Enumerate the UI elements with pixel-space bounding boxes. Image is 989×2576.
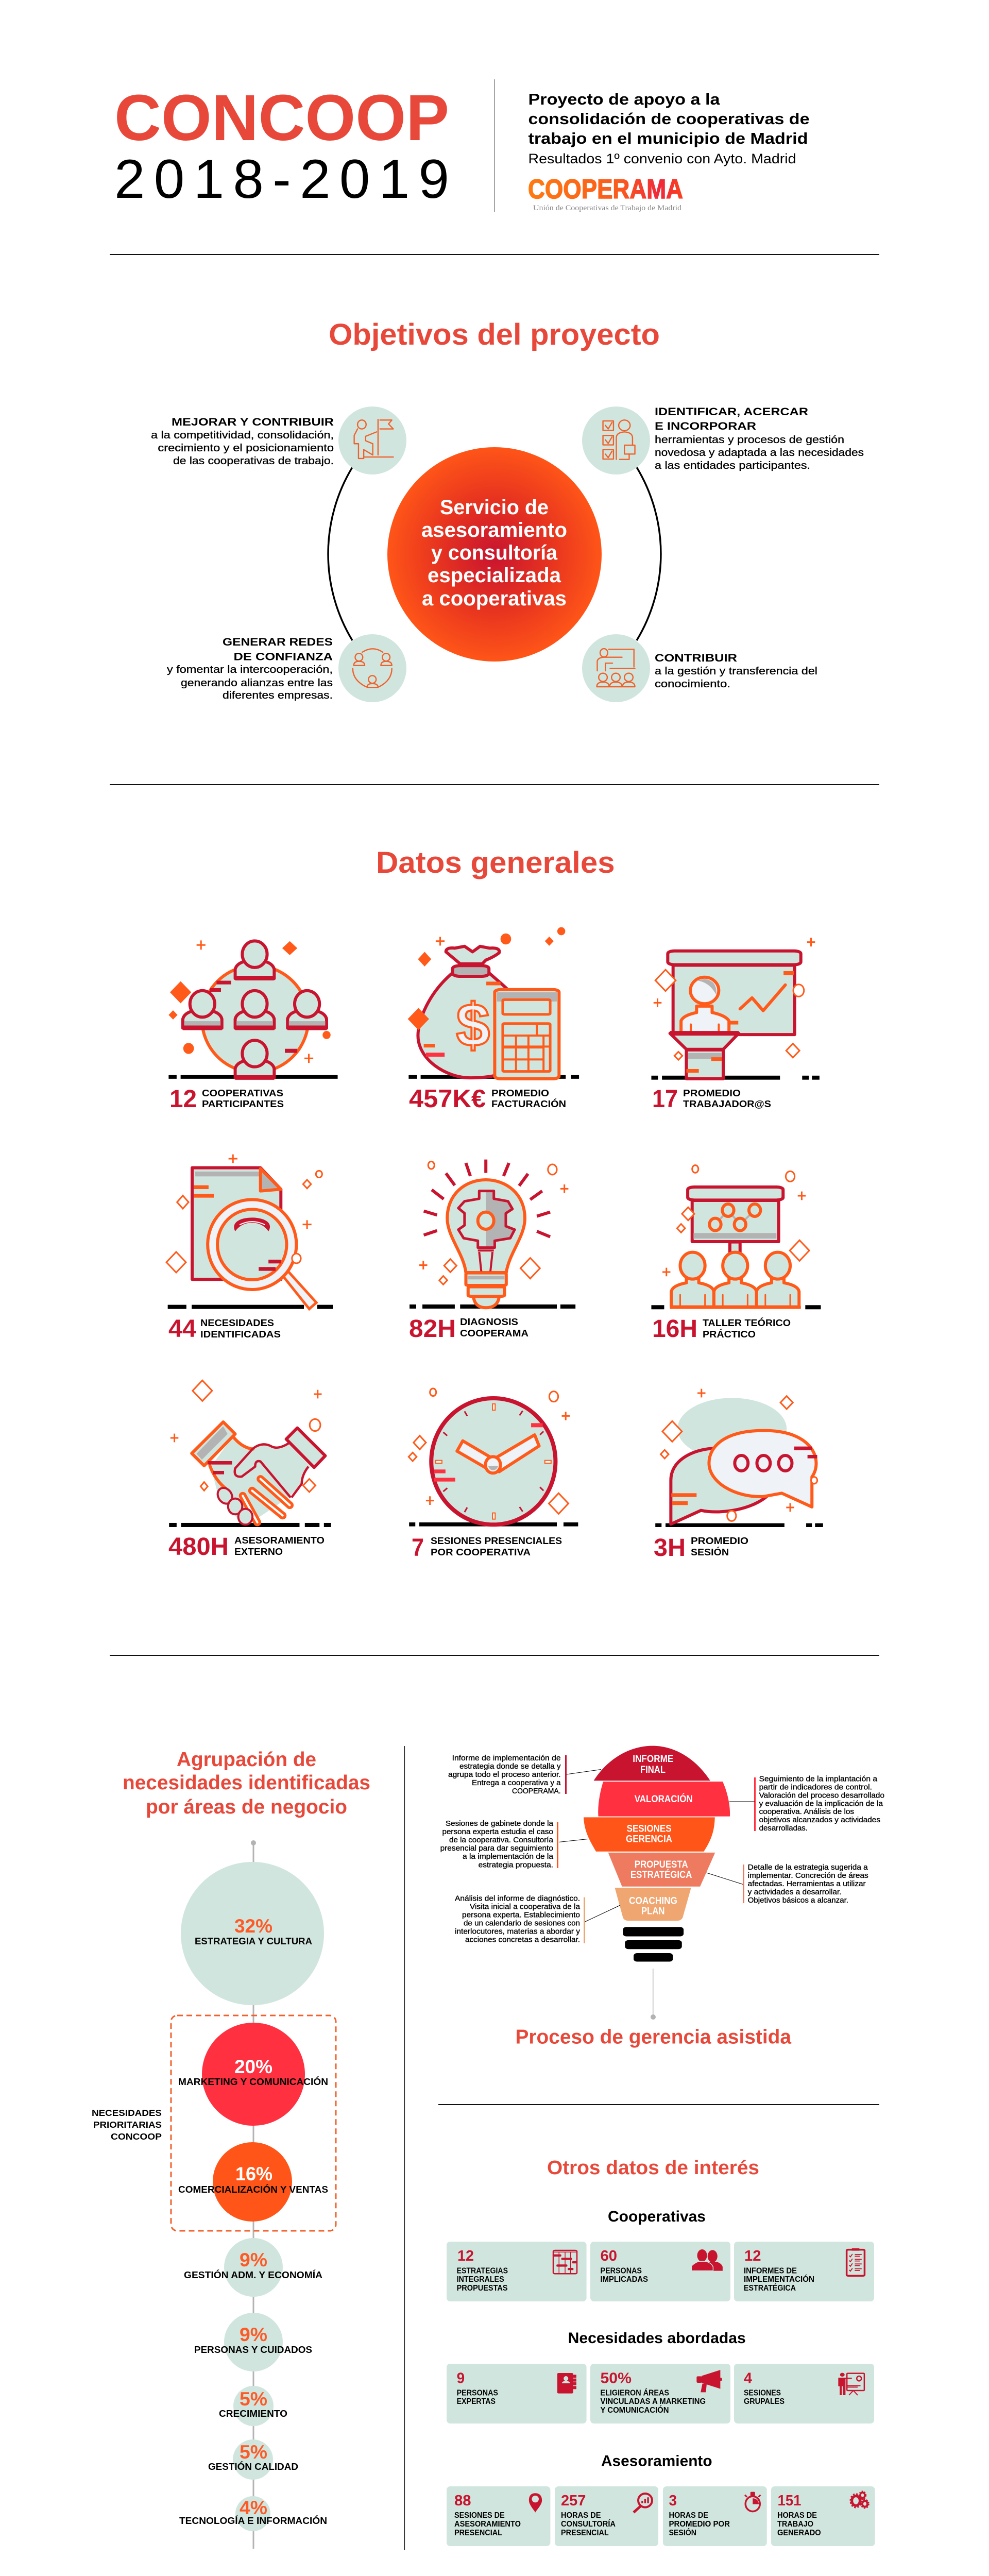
- ring arcs: [328, 467, 661, 640]
- timeline axis: [251, 1840, 256, 2549]
- card: 50% marketing: [590, 2364, 730, 2424]
- card: 4 sesiones grupales: [734, 2364, 874, 2424]
- stat: 457K€: 457K€: [409, 1085, 486, 1113]
- callout: informe final: [448, 1754, 601, 1795]
- icon: bolsa y calculadora: [408, 927, 579, 1079]
- bubble: 5% calidad: [208, 2439, 298, 2480]
- callout: coaching plan: Visita inicial a cooperativa de la: [470, 1903, 581, 1911]
- icon: presentación: [651, 938, 820, 1080]
- stat: 3H promedio: PROMEDIO: [691, 1535, 748, 1546]
- bubble: 4% tecnología: TECNOLOGÍA E INFORMACIÓN: [179, 2515, 327, 2526]
- card: 88 sesiones: ASESORAMIENTO: [454, 2520, 521, 2529]
- stat: 12 cooperativas: 12: [169, 1086, 197, 1113]
- icon: bombilla y engranaje: [410, 1160, 575, 1309]
- stat: 16H taller: TALLER TEÓRICO: [703, 1317, 791, 1328]
- stat: 7 sesiones: POR COOPERATIVA: [431, 1547, 531, 1557]
- stat: 16H taller: [652, 1315, 791, 1343]
- heading: agrupación: por áreas de negocio: [146, 1796, 347, 1818]
- bubble: 4% tecnología: 4%: [240, 2497, 267, 2518]
- bubble: 20%: 20%: [234, 2056, 272, 2077]
- card: 50% marketing: VINCULADAS A MARKETING: [601, 2397, 706, 2406]
- panel: datos generales: [166, 846, 823, 1562]
- card: 9 personas expertas: [447, 2364, 587, 2424]
- subheading: cooperativas: Cooperativas: [608, 2208, 706, 2225]
- callout: valoración: objetivos alcanzados y actividades: [759, 1816, 880, 1824]
- project description: [528, 90, 810, 166]
- chart: bombilla del proceso: [584, 1746, 730, 1962]
- card: 12 estrategias: PROPUESTAS: [457, 2284, 508, 2293]
- icon: cooperativas: [168, 940, 338, 1079]
- note: necesidades prioritarias: [92, 2108, 162, 2142]
- connector to heading: [651, 1969, 656, 2020]
- callout: sesiones gerencia: presencial para dar seguimiento: [440, 1844, 553, 1853]
- card: 257 horas: CONSULTORÍA: [561, 2520, 616, 2529]
- card: 88 sesiones: 88: [454, 2493, 471, 2509]
- card: 50% marketing: ELIGIERON ÁREAS: [601, 2389, 669, 2398]
- text: mejorar y contribuir: crecimiento y el posicionamiento: [158, 443, 334, 454]
- card: 88 sesiones: SESIONES DE: [454, 2511, 505, 2520]
- callout: sesiones gerencia: a la implementación de la: [463, 1853, 554, 1861]
- card: 151 horas: GENERADO: [777, 2529, 821, 2537]
- stat: 44 necesidades: [168, 1315, 281, 1343]
- stat: 7 sesiones: 7: [412, 1534, 424, 1562]
- card: 12 estrategias: [447, 2242, 587, 2301]
- card: 257 horas: [555, 2486, 658, 2546]
- project description: consolidación de cooperativas de: [528, 110, 810, 128]
- icon: bocadillos: [655, 1389, 823, 1527]
- icon: planificación: [553, 2250, 577, 2274]
- heading: agrupación: Agrupación de: [177, 1749, 316, 1771]
- text: identificar: novedosa y adaptada a las necesidades: [655, 447, 864, 459]
- stat: 44 necesidades: 44: [168, 1315, 196, 1343]
- callout: sesiones gerencia: [440, 1820, 588, 1869]
- text: generar redes: diferentes empresas.: [223, 690, 333, 701]
- stat: 7 sesiones: SESIONES PRESENCIALES: [431, 1535, 562, 1546]
- card: 3 horas: [663, 2486, 767, 2546]
- icon: bolsa y calculadora: $: [456, 991, 490, 1059]
- bubble: 20%: MARKETING Y COMUNICACIÓN: [178, 2076, 328, 2087]
- icon: cronómetro: [745, 2492, 760, 2512]
- callout: propuesta estratégica: implementar. Concreción de áreas: [748, 1872, 868, 1880]
- callout: valoración: partir de indicadores de control.: [759, 1784, 872, 1792]
- card: 50% marketing: 50%: [601, 2370, 632, 2387]
- card: 12 informes: ESTRATÉGICA: [744, 2284, 796, 2293]
- card: 9 personas expertas: PERSONAS: [457, 2389, 498, 2398]
- card: 257 horas: 257: [561, 2493, 586, 2509]
- labels de las fases: PLAN: [641, 1906, 664, 1917]
- callout: propuesta estratégica: afectadas. Herramientas a utilizar: [748, 1880, 866, 1888]
- icon: objective circles: [338, 406, 650, 702]
- stat: 3H promedio: [654, 1534, 748, 1562]
- stat: 3H promedio: 3H: [654, 1534, 686, 1562]
- stat: 17 trabajadores: PROMEDIO: [683, 1088, 741, 1098]
- bubble: 5% crecimiento: [219, 2386, 287, 2426]
- card: 88 sesiones: [447, 2486, 550, 2546]
- card: 3 horas: HORAS DE: [669, 2511, 708, 2520]
- bubble: 9% personas: [194, 2313, 312, 2371]
- bubble: 4% tecnología: [179, 2496, 327, 2531]
- stat: 457K€: [409, 1085, 566, 1113]
- stat: 480H asesoramiento: EXTERNO: [234, 1546, 283, 1557]
- callout: informe final: estrategia donde se detalla y: [459, 1762, 561, 1771]
- icon: agenda: [557, 2373, 576, 2394]
- text: generar redes: [167, 636, 333, 701]
- text: identificar: herramientas y procesos de gestión: [655, 434, 844, 446]
- card: 12 estrategias: ESTRATEGIAS: [457, 2267, 508, 2276]
- years: 2018-2019: [114, 148, 449, 210]
- note: necesidades prioritarias: PRIORITARIAS: [93, 2120, 162, 2130]
- stat: 17 trabajadores: [652, 1086, 771, 1113]
- stat: 16H taller: PRÁCTICO: [703, 1329, 756, 1340]
- text: identificar: IDENTIFICAR, ACERCAR: [655, 406, 808, 418]
- central circle: a cooperativas: [422, 587, 567, 610]
- heading: datos generales: Datos generales: [376, 846, 615, 879]
- heading: agrupación: necesidades identificadas: [123, 1772, 370, 1794]
- card: 50% marketing: Y COMUNICACIÓN: [601, 2405, 669, 2415]
- text: generar redes: generando alianzas entre las: [181, 677, 333, 689]
- callout: propuesta estratégica: Objetivos básicos a alcanzar.: [748, 1896, 848, 1905]
- priority box: [171, 2015, 336, 2231]
- callout: valoración: Valoración del proceso desarrollado: [759, 1792, 884, 1800]
- callout: sesiones gerencia: persona experta estudia el caso: [442, 1828, 553, 1836]
- callout: valoración: y evaluación de la implicación de la: [759, 1800, 883, 1808]
- project description: Resultados 1º convenio con Ayto. Madrid: [528, 151, 796, 166]
- stat: 12 cooperativas: PARTICIPANTES: [202, 1098, 284, 1109]
- callout: sesiones gerencia: estrategia propuesta.: [479, 1861, 553, 1869]
- card: 151 horas: HORAS DE: [777, 2511, 817, 2520]
- labels de las fases: INFORME: [633, 1754, 673, 1765]
- callout: propuesta estratégica: y actividades a desarrollar.: [748, 1888, 842, 1896]
- stat: 16H taller: 16H: [652, 1315, 697, 1343]
- text: contribuir: [655, 652, 817, 690]
- header divider: [494, 79, 495, 212]
- bubble: 20%: [178, 2023, 328, 2126]
- icon: reloj: [408, 1388, 578, 1527]
- card: 9 personas expertas: 9: [457, 2370, 465, 2387]
- labels de las fases: GERENCIA: [626, 1834, 672, 1844]
- panel: proceso de gerencia asistida: [440, 1746, 884, 2048]
- stat: 3H promedio: SESIÓN: [691, 1547, 729, 1557]
- text: identificar: a las entidades participantes.: [655, 460, 810, 471]
- heading: objetivos: Objetivos del proyecto: [329, 318, 660, 351]
- central circle: asesoramiento: [421, 519, 567, 541]
- card: 151 horas: 151: [778, 2493, 802, 2509]
- labels de las fases: VALORACIÓN: [635, 1793, 693, 1805]
- card: 88 sesiones: PRESENCIAL: [454, 2529, 502, 2537]
- stat: 17 trabajadores: 17: [652, 1086, 678, 1113]
- heading: proceso: Proceso de gerencia asistida: [515, 2026, 792, 2048]
- stat: 82H diagnosis: DIAGNOSIS: [460, 1316, 518, 1327]
- callout: coaching plan: Análisis del informe de diagnóstico.: [455, 1895, 580, 1903]
- card: 60 personas: PERSONAS: [601, 2267, 642, 2276]
- text: generar redes: y fomentar la intercooperación,: [167, 664, 333, 675]
- central circle: especializada: [428, 564, 561, 587]
- icon: documento y lupa: [166, 1155, 333, 1309]
- note: necesidades prioritarias: CONCOOP: [111, 2131, 162, 2142]
- card: 12 informes: IMPLEMENTACIÓN: [744, 2275, 814, 2284]
- stat: 12 cooperativas: COOPERATIVAS: [202, 1088, 283, 1098]
- callout: informe final: agrupa todo el proceso anterior.: [448, 1771, 561, 1779]
- icon: ubicación: [529, 2493, 542, 2513]
- panel: objetivos del proyecto: [151, 318, 864, 702]
- card: 12 estrategias: INTEGRALES: [457, 2275, 504, 2284]
- card: 12 informes: INFORMES DE: [744, 2267, 797, 2276]
- card: 257 horas: PRESENCIAL: [561, 2529, 609, 2537]
- central circle: Servicio de: [440, 496, 549, 519]
- text: mejorar y contribuir: de las cooperativas de trabajo.: [173, 455, 334, 467]
- card: 60 personas: [590, 2242, 730, 2301]
- callout: sesiones gerencia: Sesiones de gabinete donde la: [446, 1820, 554, 1828]
- project description: Proyecto de apoyo a la: [528, 90, 720, 108]
- labels de las fases: PROPUESTA: [635, 1859, 688, 1870]
- central circle: [387, 447, 602, 662]
- labels de las fases: FINAL: [640, 1765, 666, 1775]
- icon: presentador: [838, 2373, 864, 2395]
- text: identificar: [655, 406, 864, 471]
- icon: apretón de manos: [169, 1380, 331, 1527]
- logo: COOPERAMA: COOPERAMA: [528, 174, 683, 205]
- callout: coaching plan: de un calendario de sesiones con: [464, 1920, 580, 1928]
- callout: coaching plan: acciones concretas a desarrollar.: [465, 1936, 580, 1944]
- card: 3 horas: PROMEDIO POR: [669, 2520, 730, 2529]
- card: 4 sesiones grupales: 4: [744, 2370, 752, 2387]
- header: [114, 79, 810, 212]
- title: CONCOOP: CONCOOP: [114, 81, 449, 154]
- card: 3 horas: SESIÓN: [669, 2528, 696, 2537]
- callout: sesiones gerencia: de la cooperativa. Consultoría: [449, 1836, 554, 1844]
- panel: otros datos de interés: [447, 2157, 875, 2546]
- card: 60 personas: 60: [601, 2248, 617, 2264]
- callout: informe final: Informe de implementación de: [452, 1754, 561, 1762]
- stat: 82H diagnosis: COOPERAMA: [460, 1328, 528, 1338]
- stat: 7 sesiones: [412, 1534, 562, 1562]
- logo: COOPERAMA: Unión de Cooperativas de Trabajo de Madrid: [533, 204, 682, 212]
- callout: informe final: Entrega a cooperativa y a: [472, 1779, 561, 1787]
- card: 4 sesiones grupales: GRUPALES: [744, 2397, 785, 2406]
- bubble: 5% crecimiento: 5%: [240, 2388, 267, 2410]
- stat: 44 necesidades: IDENTIFICADAS: [200, 1329, 281, 1340]
- card: 257 horas: HORAS DE: [561, 2511, 601, 2520]
- card: 60 personas: IMPLICADAS: [601, 2275, 648, 2284]
- text: contribuir: conocimiento.: [655, 679, 730, 690]
- bubble: 16%: 16%: [235, 2163, 272, 2184]
- stat: 82H diagnosis: [409, 1315, 528, 1343]
- callout: valoración: Seguimiento de la implantación a: [759, 1775, 878, 1784]
- card: 9 personas expertas: EXPERTAS: [457, 2397, 496, 2406]
- bubble: 32%: 32%: [234, 1916, 272, 1937]
- labels de las fases: ESTRATÉGICA: [630, 1869, 692, 1880]
- icon: personas: [691, 2249, 723, 2271]
- card: 151 horas: TRABAJO: [777, 2520, 813, 2529]
- card: 12 estrategias: 12: [457, 2248, 474, 2264]
- project description: trabajo en el municipio de Madrid: [528, 129, 808, 147]
- icon: lupa: [634, 2494, 652, 2513]
- stat: 44 necesidades: NECESIDADES: [200, 1317, 274, 1328]
- card: 12 informes: 12: [744, 2248, 761, 2264]
- stat: 480H asesoramiento: 480H: [168, 1533, 229, 1561]
- bubble: 9% gestión: 9%: [240, 2249, 267, 2270]
- labels de las fases: SESIONES: [627, 1824, 672, 1834]
- note: necesidades prioritarias: NECESIDADES: [92, 2108, 162, 2118]
- subheading: asesoramiento: Asesoramiento: [601, 2453, 712, 2470]
- icon: taller: [651, 1165, 821, 1309]
- card: 4 sesiones grupales: SESIONES: [744, 2389, 781, 2398]
- bubble: 9% gestión: [184, 2238, 322, 2297]
- callout: coaching plan: interlocutores, materias a abordar y: [455, 1928, 581, 1936]
- stat: 17 trabajadores: TRABAJADOR@S: [683, 1098, 771, 1109]
- card: 3 horas: 3: [669, 2493, 677, 2509]
- text: generar redes: GENERAR REDES: [223, 636, 333, 648]
- bubble: 16%: COMERCIALIZACIÓN Y VENTAS: [178, 2184, 328, 2195]
- callout: valoración: desarrolladas.: [759, 1824, 808, 1833]
- bubble: 5% calidad: 5%: [240, 2442, 267, 2463]
- bubble: 5% calidad: GESTIÓN CALIDAD: [208, 2461, 298, 2472]
- icon: lista de control: [847, 2248, 864, 2276]
- card: 12 informes: [734, 2242, 874, 2301]
- icon: megáfono: [696, 2370, 722, 2392]
- text: contribuir: a la gestión y transferencia del: [655, 666, 817, 677]
- card: 151 horas: [771, 2486, 875, 2546]
- bubble: 32%: [181, 1862, 324, 2005]
- stat: 12 cooperativas: [169, 1086, 284, 1113]
- callout: informe final: COOPERAMA.: [512, 1787, 561, 1795]
- stat: 480H asesoramiento: [168, 1533, 325, 1561]
- stat: 480H asesoramiento: ASESORAMIENTO: [234, 1535, 325, 1546]
- callout: propuesta estratégica: [707, 1863, 868, 1905]
- text: mejorar y contribuir: a la competitividad, consolidación,: [151, 430, 334, 441]
- callout: valoración: cooperativa. Análisis de los: [759, 1808, 854, 1816]
- bubble: 5% crecimiento: CRECIMIENTO: [219, 2409, 287, 2419]
- bubble: 9% personas: 9%: [240, 2324, 267, 2345]
- stat: 457K€: PROMEDIO: [491, 1088, 549, 1098]
- central circle: y consultoría: [431, 541, 558, 564]
- icon: engranajes: [850, 2492, 868, 2508]
- stat: 457K€: FACTURACIÓN: [491, 1098, 566, 1109]
- stat: 82H diagnosis: 82H: [409, 1315, 456, 1343]
- callout: coaching plan: [455, 1895, 620, 1944]
- bubble: 9% personas: PERSONAS Y CUIDADOS: [194, 2345, 312, 2355]
- panel: agrupación de necesidades: [92, 1749, 370, 2549]
- bubble: 9% gestión: GESTIÓN ADM. Y ECONOMÍA: [184, 2269, 322, 2280]
- callout: valoración: [729, 1775, 884, 1833]
- text: mejorar y contribuir: MEJORAR Y CONTRIBUIR: [172, 416, 334, 428]
- labels de las fases: [626, 1754, 693, 1917]
- text: identificar: E INCORPORAR: [655, 420, 756, 432]
- text: generar redes: DE CONFIANZA: [234, 651, 333, 663]
- text: mejorar y contribuir: [151, 416, 334, 467]
- text: contribuir: CONTRIBUIR: [655, 652, 737, 664]
- bubble: 32%: ESTRATEGIA Y CULTURA: [195, 1936, 312, 1946]
- callout: propuesta estratégica: Detalle de la estrategia sugerida a: [748, 1863, 868, 1872]
- bubble: 16%: [178, 2142, 328, 2222]
- labels de las fases: COACHING: [629, 1896, 677, 1907]
- heading: otros datos: Otros datos de interés: [547, 2157, 759, 2179]
- subheading: necesidades abordadas: Necesidades abordadas: [568, 2330, 746, 2347]
- callout: coaching plan: persona experta. Establecimiento: [462, 1911, 580, 1920]
- heading: agrupación: [123, 1749, 370, 1818]
